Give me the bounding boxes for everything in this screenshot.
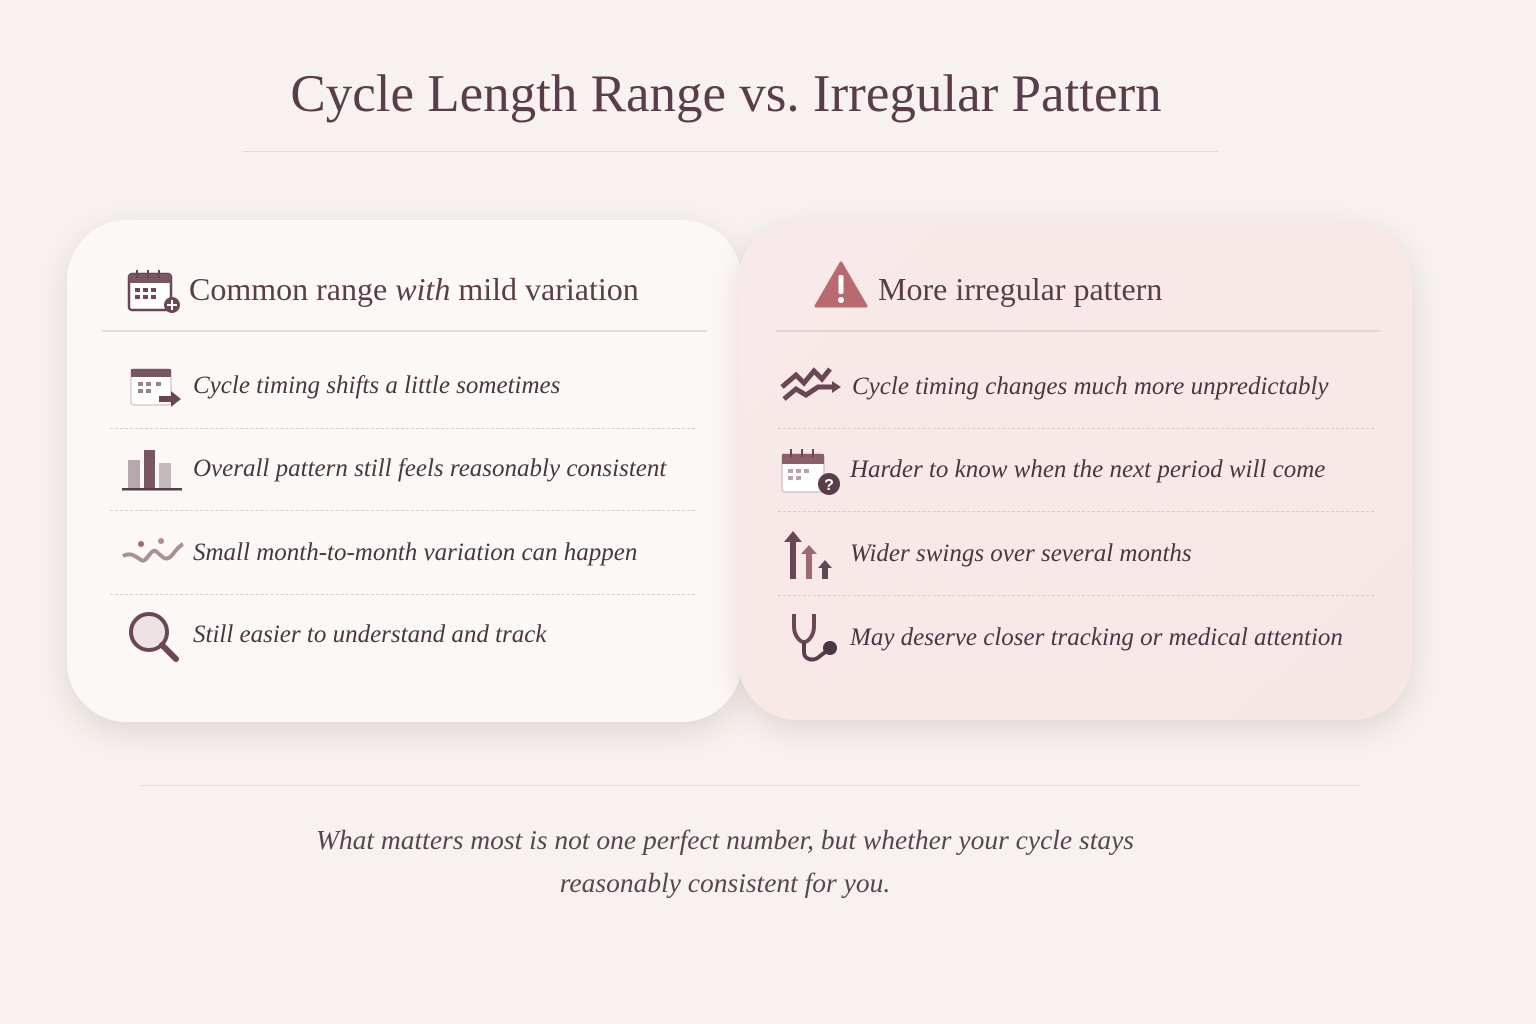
item 3: Small month-to-month variation can happen xyxy=(193,539,637,566)
icon: up arrows xyxy=(784,531,832,579)
item 3: Wider swings over several months xyxy=(850,540,1192,567)
icon: calendar arrow xyxy=(130,368,181,407)
footer note xyxy=(316,824,1134,898)
footer note: What matters most is not one perfect number, but whether your cycle stays xyxy=(316,824,1134,855)
heading: common range: Common range with mild variation xyxy=(189,271,639,307)
panel: common range xyxy=(67,220,742,722)
item 1: Cycle timing changes much more unpredictably xyxy=(852,373,1329,400)
heading: irregular: More irregular pattern xyxy=(878,271,1162,307)
icon: warning triangle xyxy=(814,261,868,308)
icon: wave xyxy=(122,538,184,563)
item 1: Cycle timing shifts a little sometimes xyxy=(193,372,560,399)
icon: calendar question: ? xyxy=(824,477,834,494)
item 2: Harder to know when the next period will come xyxy=(850,456,1325,483)
icon: calendar question xyxy=(781,449,840,495)
icon: calendar plus xyxy=(128,270,180,313)
item 2: Overall pattern still feels reasonably consistent xyxy=(193,455,666,482)
footer note: reasonably consistent for you. xyxy=(560,867,890,898)
title: Cycle Length Range vs. Irregular Pattern xyxy=(290,65,1162,123)
item 4: Still easier to understand and track xyxy=(193,621,546,648)
icon: stethoscope xyxy=(792,614,837,662)
panel: irregular pattern xyxy=(738,222,1412,720)
icon: bars xyxy=(122,450,182,490)
icon: magnifier xyxy=(129,612,179,662)
icon: zigzag arrows xyxy=(780,367,841,401)
item 4: May deserve closer tracking or medical attention xyxy=(850,624,1343,651)
